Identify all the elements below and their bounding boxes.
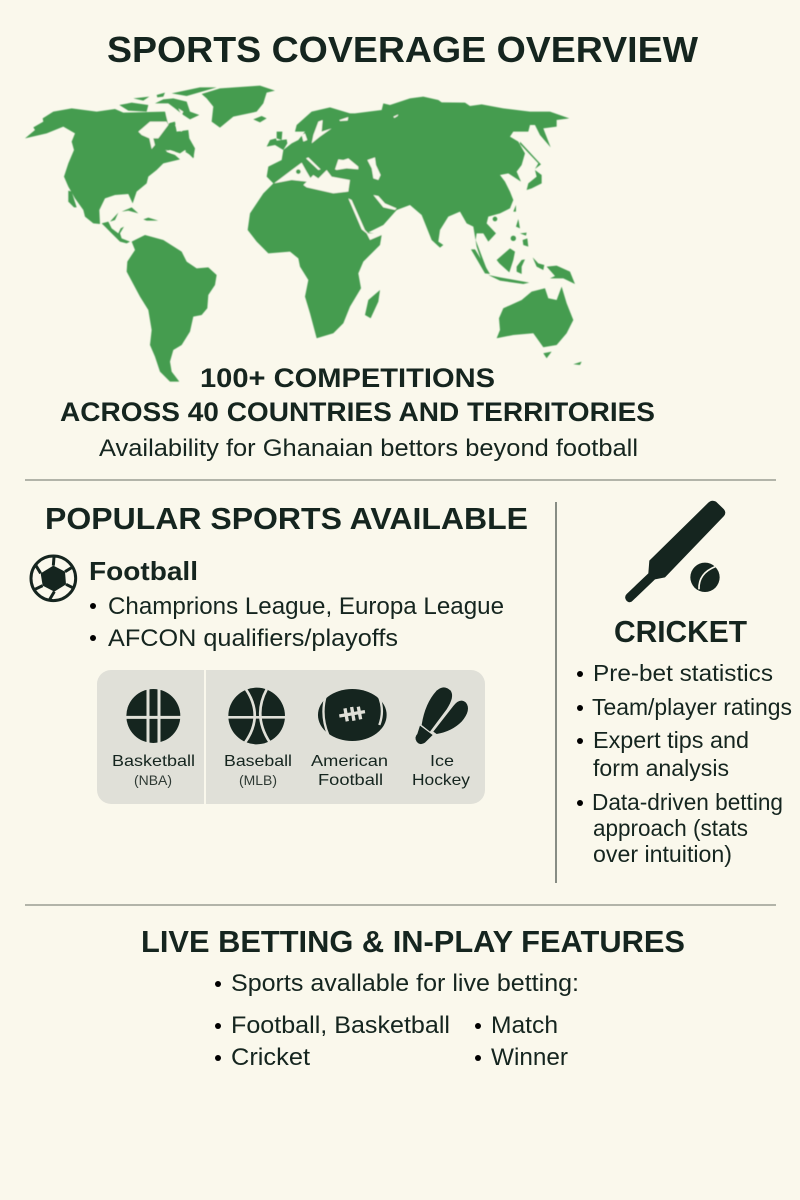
label: ice hockey: Ice — [430, 753, 454, 770]
live betting sports list: Cricket — [231, 1044, 310, 1071]
map: inland seas — [274, 114, 398, 240]
label: baseball: Baseball — [224, 753, 292, 770]
live betting markets list: Winner — [491, 1044, 568, 1071]
label: ice hockey — [412, 753, 470, 789]
label: baseball: (MLB) — [239, 772, 277, 788]
football bullets: AFCON qualifiers/playoffs — [108, 625, 398, 652]
label: ice hockey: Hockey — [412, 772, 470, 789]
heading: popular sports: POPULAR SPORTS AVAILABLE — [45, 501, 528, 536]
world map — [25, 86, 582, 382]
heading: cricket: CRICKET — [614, 614, 747, 649]
icon: ice hockey — [415, 687, 468, 744]
cricket bullets — [577, 660, 792, 867]
label: basketball: (NBA) — [134, 772, 172, 788]
live betting markets list — [475, 1012, 568, 1071]
football bullets — [90, 593, 504, 652]
label: baseball — [224, 753, 292, 788]
panel: other sports — [97, 670, 485, 804]
label: american football: Football — [318, 772, 383, 789]
headline: competitions: ACROSS 40 COUNTRIES AND TERRITORIES — [60, 397, 655, 427]
map: Europe, Africa, Asia and Oceania — [248, 97, 582, 365]
live betting intro bullet: Sports avallable for live betting: — [231, 970, 579, 997]
map: Americas and Greenland — [25, 86, 275, 382]
live betting sports list — [215, 1012, 450, 1071]
football heading: Football — [89, 556, 198, 586]
cricket bullets: Team/player ratings — [592, 694, 792, 720]
icon: baseball — [227, 688, 287, 744]
cricket bullets: Data-driven betting — [592, 789, 783, 815]
cricket bullets: Pre-bet statistics — [593, 660, 773, 686]
cricket bullets: Expert tips and — [593, 727, 749, 753]
panel: cricket — [577, 501, 792, 867]
label: basketball — [112, 753, 195, 788]
headline: competitions — [60, 363, 655, 427]
title: SPORTS COVERAGE OVERVIEW — [107, 29, 698, 70]
football bullets: Champrions League, Europa League — [108, 593, 504, 620]
icon: cricket bat and ball — [625, 501, 725, 602]
panel: popular sports — [31, 501, 528, 804]
subheading: Availability for Ghanaian bettors beyond football — [99, 435, 638, 462]
cricket bullets: over intuition) — [593, 841, 732, 867]
icon: soccer ball — [31, 556, 76, 601]
label: american football — [311, 753, 388, 789]
cricket bullets: approach (stats — [593, 815, 748, 841]
label: basketball: Basketball — [112, 753, 195, 770]
heading: live betting: LIVE BETTING & IN-PLAY FEATURES — [141, 924, 685, 959]
cricket bullets: form analysis — [593, 755, 729, 781]
live betting markets list: Match — [491, 1012, 558, 1039]
icon: basketball — [125, 688, 182, 743]
live betting sports list: Football, Basketball — [231, 1012, 450, 1039]
panel: live betting — [141, 924, 685, 1071]
headline: competitions: 100+ COMPETITIONS — [200, 363, 495, 393]
icon: american football — [318, 689, 387, 741]
label: american football: American — [311, 753, 388, 770]
